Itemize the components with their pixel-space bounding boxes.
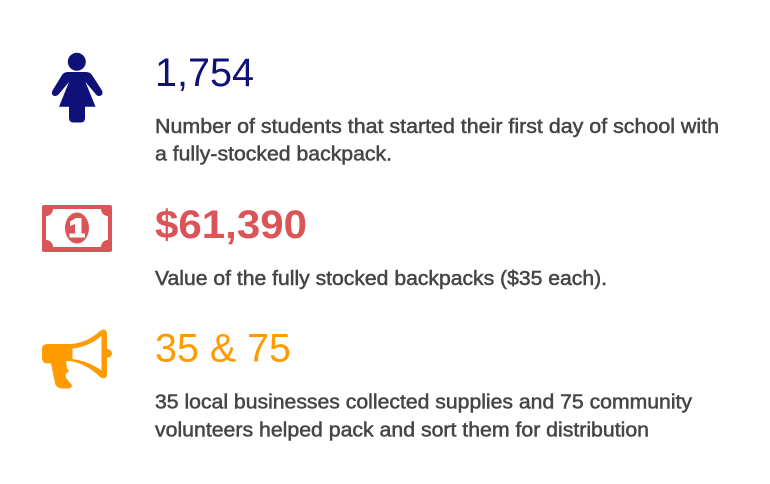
description: volunteers [155,392,692,442]
description: students: Number of students that started their first day of school with [155,116,719,138]
icon: person [52,53,103,122]
stat: 1,754: 1,754 [155,51,254,95]
description: students: a fully-stocked backpack. [155,144,392,166]
description: value: Value of the fully stocked backpacks ($35 each). [155,268,607,290]
description: students [155,116,719,166]
description: volunteers: 35 local businesses collected supplies and 75 community [155,392,692,414]
description: volunteers: volunteers helped pack and sort them for distribution [155,420,649,442]
icon: dollar bill [42,205,112,252]
icon: megaphone [42,330,112,388]
stat: $61,390: $61,390 [155,203,307,247]
stat: 35 & 75: 35 & 75 [155,326,291,370]
